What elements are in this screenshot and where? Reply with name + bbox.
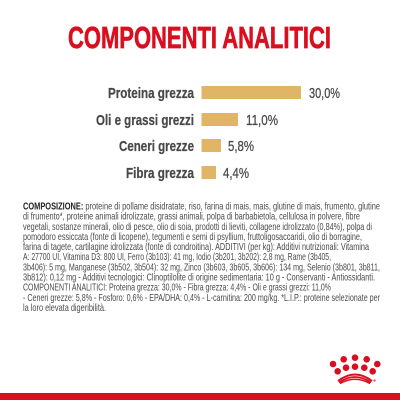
bar chart: analytical components bbox=[96, 85, 340, 182]
row: oils and fats: 11,0% bbox=[246, 112, 278, 129]
composition text block bbox=[23, 202, 380, 314]
row: ash: Ceneri grezze bbox=[119, 138, 194, 155]
row: fibre: Fibra grezza bbox=[126, 165, 195, 182]
row: ash: 5,8% bbox=[228, 138, 254, 155]
row: fibre: 4,4% bbox=[223, 165, 249, 182]
row: protein: 30,0% bbox=[309, 85, 340, 102]
row: oils and fats: Oli e grassi grezzi bbox=[96, 112, 194, 129]
icon: crown logo bbox=[330, 354, 381, 384]
footer red band bbox=[0, 393, 400, 400]
row: protein bbox=[108, 85, 340, 102]
composition text block: la loro elevata digeribilità. bbox=[23, 303, 106, 314]
row: protein: Proteina grezza bbox=[108, 85, 195, 102]
